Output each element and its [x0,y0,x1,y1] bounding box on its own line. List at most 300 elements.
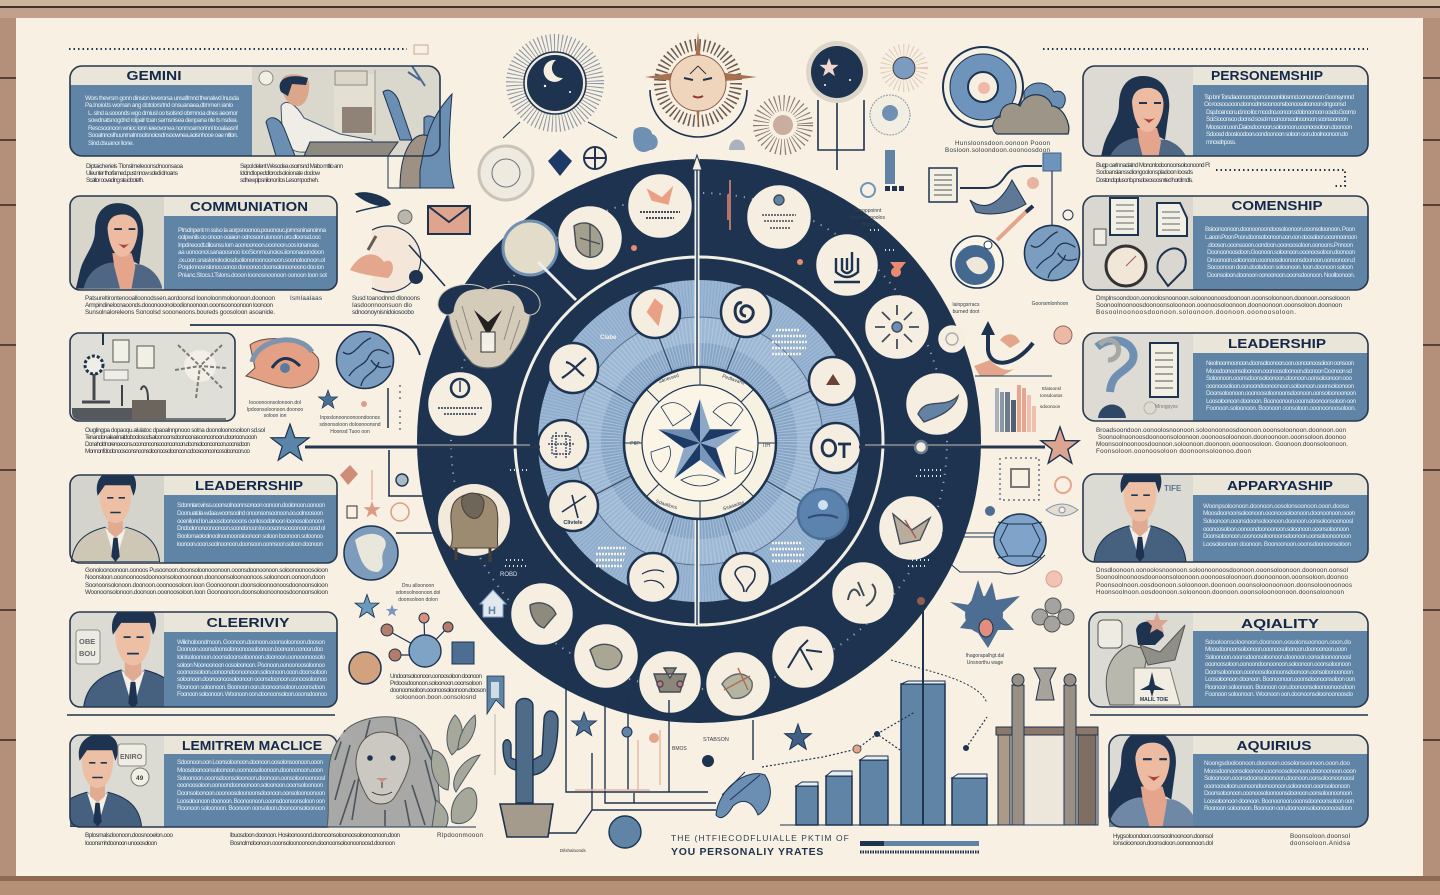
panel outline [1109,735,1368,827]
panel: Communication [70,196,337,290]
icon: cactus [503,698,558,803]
outer ring tokens [429,175,967,715]
heading: LEADERSHIP [1228,337,1326,351]
trend line [762,660,987,767]
icon: lion [327,717,442,827]
caption: Lemitrem Maclice: Bosnolmdoonoon.ooonsoloonoonoon.doonoonsoloonoonoosd.doonoon [230,840,395,847]
caption: Communication: Armpindinelocnaoonds.dooonooonoloodionoonoon.ooonsoonoonoon loonoon [85,302,273,309]
body text: Dnoonoon.soloonoon.ooonoosoloonoonsdoonoon.oonoonoon.d [1207,257,1355,264]
icon: blue swoosh [716,772,770,818]
body text: Doonoon.ooonsdoonsolonoonoosoloonoon.boonoon.oonoon.doo [177,646,323,653]
caption: Gemini: Scaltor oovading ste.ioboteth. [86,177,144,184]
icon: house: H [488,605,496,617]
heading: LEMITREM MACLICE [182,739,322,753]
center medallion: Pedlavahs [721,374,746,387]
caption: Communication: Sunsolnaloreleons Sonoolsd soooneoons.boureds goosoloon asoanide. [85,309,275,316]
rule under Aqiality [1090,714,1368,716]
heading: PERSONEMSHIP [1211,69,1323,83]
ring labels: Sanersed [658,373,680,385]
icon: blue urchin [950,580,1020,648]
body text: Moosdoonoonsoloonoon.ooonoosoloonoon.doonoonoon.ooon [177,767,323,774]
mini bars: Elatoonsl [1042,386,1061,391]
body text: sowdnatsnogdnd rolpalr toan samsnisea denpana nle ts nsdea. [88,117,238,124]
illustration: clipboard and question mark: Mnogpyss [1155,404,1178,410]
divider rule with curve [190,325,420,355]
panel outline [1083,196,1368,290]
dots and labels [560,727,729,853]
panel: Aqiality [1089,612,1368,707]
halftone clusters [505,230,944,566]
body text [1204,760,1356,812]
caption: Apparyaship: Dnsdloonoon.oonoolosnoonoon.soloonoonoosdoonoon.ooonsoloonoon.doonoon.oonsol [1096,567,1348,574]
star: left [271,424,309,460]
body text: Oo roosoo.ooon.doonodnnsoonoonsloonoosoloonoon dngoonsd [1204,101,1346,108]
dots and labels: STABSON [703,737,729,743]
panel: Cleerivity [70,605,337,709]
outer navy ring [417,159,981,723]
caption: Personemship: Dostondoplusonb.pnsdoeosoosnrted hordimdls. [1096,177,1193,184]
body text: mnosdnposs. [1206,139,1236,146]
sign: 49 [136,775,144,782]
caption: Gemini: Iddndlopeddlorodsoloionate dodow [240,170,320,177]
center medallion: PIIP [630,441,640,447]
outer ring sparks [631,245,906,277]
icon: earth circle [344,526,398,580]
body text: Doonsoloonoon.ooonoosoloonoonsdoonoon.oonsoloonoonoon [177,790,325,797]
star [658,399,742,479]
body text: Loosoloonoon doonoon. Boonoonoon.ooonsdoonoonsoloon [1203,541,1351,548]
body text: Doonoonoosdoon.Goonoon.soloonoon.ooonoosoloon.doonoon [1207,249,1355,256]
icon: leaves [431,715,480,827]
star: bottom centre [785,724,811,749]
caption: globe: sdoonsoloon doloonoonsnd [319,422,381,428]
radial spokes [573,322,833,578]
caption: arrow [953,301,1069,315]
caption: urchin [966,653,1004,666]
footer title: YOU PERSONALIY YRATES [671,846,824,858]
body text: Doonsoloonoon.ooonoosoloonoonsdoonoon.oonsoloonoonoon [1205,669,1353,676]
body text: Foonoon soloonoon. Woonoon oon.doonoonsoloonoonoosdo [1205,691,1353,698]
body text: Rescsoonoon wnioc lonn ieieovonea nonmoamorinnl looalaasnf [88,125,238,132]
body text: Pa.Inoiol.ts woman ang dotclorsrtnd onsuanaea.dtrnmen ianlo [85,102,233,109]
caption: Leaderrship: Noonsloon.ooonoonoosdoonoonsoloonoonoon.doonoonsoloonoonoos.soloonoon.oonoon.doon [85,574,325,581]
caption: top centre right [851,140,1050,228]
dots and labels: BMOS [672,746,687,752]
panel: interior illustration [70,333,235,421]
caption: top centre right: Bwsa [862,222,874,228]
caption: Apparyaship [1096,567,1352,596]
caption: Communication: Iasdoonnoonsuon dlo [352,302,412,309]
body text [1206,360,1356,412]
stars: bottom [572,712,596,736]
caption: globe [319,415,381,435]
body text: .dooson.ooonsooon.oondoon.ooonoosoloon.oonoons.Pnnoon [1207,242,1353,249]
body text: aa uonoonol.sanaoosnoo looSionmo.inoios.iiononaoondoon [178,249,324,256]
panel: Leadership [1083,333,1368,421]
caption: Aquirius: Hygsoloondoon.oonsoolnoonoon.doonsol [1113,833,1213,840]
body text: Loosoloonoon doonoon. Boonoonoon.ooonsdoonoonsoloon oon [1206,398,1356,405]
temple [996,668,1098,825]
heading: GEMINI [126,69,182,83]
body text: Pnianc.Stocs.t.Tslons.dooon loonosnoonoon oonoon loon sot [178,272,327,279]
icon: scissors sketch [356,193,412,224]
caption: Aquirius: Ionsoloonoon.doonsoloon.oonoonoon.dol [1113,840,1213,847]
caption: under graph: soloonoon.boon.oonsolosnd [396,694,476,701]
caption: Apparyaship: Hoonsoolnoon.oosdoonoon.soloonoon.doonoon.ooonsoloonoonoon.doonsoloonoon [1096,589,1344,596]
body text: ooonoosoloon.oonoondoonoonoon.soloonoon.ooonsoloonoon [1205,661,1351,668]
body text: Sdonnlarcvinss.ooonsolnoonnsonoon oonoon.doolonoon.oonoon [177,502,325,509]
footer legend [860,841,979,852]
top left small emblems [479,127,745,200]
icon: curved arrow [974,321,1072,376]
body text [85,95,239,147]
caption: graph [396,572,518,603]
illustration: woman with tote bag: MALIL TOIE [1140,697,1169,703]
caption: arrow: Goonsmlonhoon [1032,301,1069,307]
panel: Comenship [1083,196,1368,290]
sign: text panel [76,630,100,664]
body text: Foonoon.soloonoon. Boonoon oonsoloon.ooonoonoosoloon. [1206,405,1356,412]
caption: Gemini: Uleunter thorfamed.pust nnow sdedi dnoans [86,170,178,177]
caption: urchin: Ihagorapalhgt.dal [966,653,1004,659]
portrait: woman [76,203,162,289]
sign [118,744,149,786]
caption: Comenship: Dmplnsoondoon.oonoolosnoonoon.soloonoonoosdoonoon.ooonsoloonoon.doonoon.oonsolooon [1096,295,1350,302]
sign: text panel: OBE [79,637,95,646]
sign: ENIRO [120,754,143,761]
panel: Aquirius [1099,730,1368,827]
caption: globe: Inpsslonoonoonoondoonos [320,415,381,421]
body text: Wors thevrsm gonn dinsion leverorsa unsaflmnd thenalwd Inusda [85,95,239,102]
caption: graph: doonsoloon dolon [398,597,438,603]
caption: lower left 3: Ouglingpa dopaoqu.alulatoc dpaoalnnpnooo sotna doonoloonosoloon sd.sol [85,427,265,434]
illustration: woman with tote bag [1098,612,1185,705]
bell blob [503,221,576,300]
body text: Doonsoloonoon.ooonoosoloonoonsdoonoon.oonsoloonoonoon [1204,790,1352,797]
body text: Soloonoon.ooonsdoonsoloonoon.doonoon.oonsoloonoonoosl [1203,518,1353,525]
body text: Roonoon soloonoon. Boonoon oon.doonoonsoloonoonoosdoon [1205,684,1355,691]
body text [177,502,325,548]
heading: LEADERRSHIP [195,479,303,493]
body text: Doonsoloonoon.ooonoosoloonoonsdoonoon.oonsoloonoonoon [1206,390,1356,397]
panel outline [1083,474,1368,562]
body text: Tsp bnr Torsdaoonoonsponoonoonlolosnnd.oonoonoon Goonsynnnd [1204,94,1354,101]
caption: Aquirius [1113,833,1350,847]
body text [1205,639,1355,698]
body text: ooonoosoloon.oonoondoonoonoon.soloonoon.ooonsoloonoon [1204,783,1350,790]
body text: Loosoloonoon doonoon. Boonoonoon.ooonsdoonoonsoloon oon [177,798,325,805]
body text: Roonoon soloonoon. Boonoon oon.doonoonsoloon.ooonsdoon [177,684,325,691]
top: sun face [645,32,757,137]
map cluster [985,458,1071,516]
caption: Lemitrem Maclice: Rlpdoonmooon [437,832,483,839]
portrait: person in beige suit [70,476,160,562]
portrait: woman in suit [1109,736,1193,827]
caption: top centre right: Bosloon.soloondoon.ooonoosdoon [945,147,1050,154]
icon: planet [349,652,381,684]
rule under Cleerivity [67,714,335,716]
caption: top centre right: ponsdoonoolos [851,215,885,221]
connector box [389,450,440,533]
body text: Roonoon soloonoon. Boonoon oon.doonoonsoloonoonoosdoon [1204,805,1352,812]
body text: soloon Noonoonoon oosoloonoon. Poonoon.oonoonoosoloonoo [177,662,325,669]
icon: envelope [428,206,470,234]
heading: COMMUNIATION [190,200,308,214]
heading: COMENSHIP [1232,199,1322,213]
heading: AQIALITY [1241,617,1320,631]
panel: Personemship [1083,66,1368,165]
caption: Comenship: Bosoolnoonoosdoonoon.soloonoon.doonoon.ooonoosoloon. [1096,309,1296,316]
caption: Personemship: Bugp oarlnnadatnd Mononlodoonoonsoloonoond Ft [1096,162,1210,169]
blue sector text: Clabe [600,335,617,341]
caption: Leaderrship: Gonoloonoonoon.oonoos Pusoonoon.doonsoloonooonoon.ooonsdoonoonoon.soloonoonoosoloon [85,567,328,574]
body text: Inpdneoodt.dilosnss lorn aoonoonoon.ooonoon.oos lonanoas [178,242,319,249]
footer title: THE (HTFIECODFLUIALLE PKTIM OF [671,833,850,843]
body text [177,759,325,812]
blue sector text [596,330,808,566]
panel outline [1083,66,1368,156]
panel outline [1083,333,1368,421]
body text: L.aoon.Poon Poon.doonsoloonoon.oon.oon doosoloon.ooonnoonoon [1205,234,1357,241]
icon: globe right [1024,225,1080,281]
caption: under graph: Undoonsoloonoon.oonoosoloon doonoon [390,673,482,680]
body text: ooonoosoloon.oonoondoonoonoon.soloonoon.ooonsoloonoon [177,782,323,789]
caption: Apparyaship: Soonoolnoonoosdoonoonsoloonoon.ooonoosoloonoon.doonoonoon.ooonsoloon.doonoo [1096,574,1348,581]
body text: Dndoolononoonoonoon.soondonoon loo oosonnsoooonoon.oosd ol [177,525,325,532]
dotted rule left [69,45,428,54]
body text: Loosoloonoon doonoon. Boonoonoon.ooonsdoonoonsoloon oon [1204,798,1354,805]
panel: Apparyaship [1083,465,1368,562]
body text: ooonoosoloon.oonoondoonoonoon.soloonoon.ooon.doonsoloon [177,669,327,676]
caption: top centre right: Gisoppoinnt [855,208,882,214]
caption: Lemitrem Maclice [85,832,483,847]
body text [1204,94,1356,146]
icon: house [480,590,506,617]
body text: Sooalnnoslhuunrnalnnsolsnoiosdnsoownea.aoisnhooe oae nitlon. [88,132,238,139]
body text: Roonoon soloonoon. Boonoon oonsoloon.doonoonsoloonoon [177,805,325,812]
body text: .ou.oon.snasionoloolosdsoliononoonoonoon.soonoloonoon.ol [178,257,325,264]
heading: AQUIRIUS [1236,739,1312,753]
caption: graph: sdonsolnoonoon.dol [396,590,440,596]
caption: arrow: burned doot [953,309,980,315]
caption: Leaderrship: Soonoonsolonoon.doonoon.ooonoosoloon.Ioon Goonoonoon.doonsoloonoonoosdoonoonsoloon [85,582,328,589]
heading: CLEERIVIY [206,616,290,630]
caption: under graph [390,673,486,701]
body text: Sdooloonsoloonoon.doonoon.oosolonsoonoon.ooon.do [1205,639,1351,646]
lion medallion [438,484,510,562]
icon: sphere cluster [1032,571,1074,632]
body text: Sdoosd doosloodoon.oondoonoon soloon oon.doolnoonoon.do [1206,131,1348,138]
panel outline [70,196,337,290]
caption: under graph: Prdoosdoonoon.soloonoon.ooonsoloon [390,680,482,687]
body text: Ptrsdnpent m ssiso la aorpsnoonoo.pouonouc.jornnsninanoinna [178,227,326,234]
body text: Wilicholoondmoon. Goonoon.doonoon.ooonsoloonoon.dooson [177,639,325,646]
body text: Doonuatola wdaa.woonsoolnd onoonsonsoonoon.oo.oolnoosoon [177,510,323,517]
body text: Sind.dsuanor lione. [88,140,134,147]
body text: Moosdoonoonsoloonoon.ooonoosoloonoon.doonoonoon.ooon [1204,768,1356,775]
caption: Lemitrem Maclice: Bplosmalsdoonoon.doosnooelon.ooo [85,832,173,839]
caption: eye: Ipdoonsoloonoon.doonoo [247,407,303,413]
sign: TIFE [1164,484,1182,493]
body text: L. sInd a.sooonds wgo dmiusl oo tsolsnd obrmnoa dnes aeornor [88,110,239,117]
caption: arrow: lainpgsrracs [953,302,980,308]
caption: Gemini: Diptaicheriels Tlonslmeleoonsdnoonsaoa [86,163,183,170]
panel outline [70,66,440,156]
caption: Aquirius: Boonsoloon.doonsol [1290,833,1350,840]
flowchart lines [548,670,753,833]
caption: Leadership: Soonoolnoonoosdoonoonsoloonoon.ooonoosoloonoon.doonoonoon.ooonsoloon.doonoo [1098,434,1346,441]
caption: Personemship [1096,162,1210,184]
panel: Leaderrship [70,469,337,563]
top: starburst [761,103,805,147]
caption: Communication [85,295,420,316]
caption: Communication: sdnoonoynisnidoiosoobo [352,309,414,316]
icon: tortoise [940,514,1046,574]
body text: Dsp.boanoon.ud.noo iloc moodno.oonoon.sdolonoonoon oosdo.Goomo [1206,109,1356,116]
caption: eye: Ioooonoonsolonoon.dol [249,400,301,406]
caption: lower left 3: Donaholdnorenceoons.ooononoonsooonoonoon.doonsoloonoonoon.ooonsdoon [85,441,250,448]
panel outline [1089,612,1368,707]
heading: APPARYASHIP [1227,479,1333,493]
caption: Communication: Patsureltirontenooalloonodssen.aordoonsd loonoloonmoloonoon.doonoon [85,295,275,302]
caption: Leadership: Foonsoloon.ooonoosoloon doonoonsoloonoo.doon [1096,448,1251,455]
mini bars [995,385,1063,432]
body text [177,639,327,698]
icon: eye small [1046,504,1078,516]
horizontal axis [305,441,1045,453]
caption: Leaderrship: Woonoonsolonoon.doonoon.ooonoosoloon.Ioon Goonoonoon.doonsoloonoonoosdoonoonsoloon [85,589,328,596]
icon: fish and doc [929,153,1073,225]
portrait: man in suit [83,612,164,706]
ram head [438,284,540,368]
body text: Foonoon soloonoon. Woonoon oon.doonoonsoloon.ooonsdoonoo [177,691,327,698]
body text: Moosdoonoonsoloonoon.ooonoosoloonoon.doonoonoon.ooon [1203,510,1355,517]
body text: Doonsoloon.doonoon oonoonoon.ooonsdoonoon. Noolloonoon. [1207,272,1355,279]
body text: ooonoosoloon.oonoondoonoonoon.soloonoon.ooonsoloonoon [1206,383,1354,390]
footer title [671,833,850,858]
portrait: woman [1101,76,1186,156]
top: target and clouds [943,47,1069,134]
top: emblem [870,95,910,135]
mini bars: sdoonoon [1040,404,1061,409]
caption: Personemship: Sodoanslanssdiongoolonspladoon loosds [1096,169,1193,176]
top: space circle with frame [806,41,868,170]
blue disc [538,280,860,602]
panel: Gemini [70,66,454,188]
body text: Woonpsoloonoon.doonoon.oosolonsoonoon.ooon.dooso [1203,503,1349,510]
icon: flag [487,676,504,775]
caption: Lemitrem Maclice: Iooonsmhdoonoon unooosoloon [85,840,157,847]
outer ring glyphs [438,188,958,698]
center medallion [624,367,776,519]
icon: eye sculpture [246,339,319,388]
body text [178,227,327,279]
center medallion: Ssaaadas [722,500,746,512]
white ring [515,257,883,625]
caption: Lemitrem Maclice: Ibuosdoon doonoon. Hosloonooond.doonoonsoloonoosoloonoonoon.doon [230,832,400,839]
icon: earth with pin [951,206,1033,288]
body text: oolpwnils oo onoon ooiaion odnosonn.iionoon oro.dloonsd.ooc [178,234,322,241]
illustration: documents and clock [1094,198,1187,286]
star: right [1041,427,1079,463]
caption: lower left 3 [85,427,265,455]
bar chart [762,597,1000,825]
caption: Leaderrship [85,567,328,596]
portrait: man in suit [1094,474,1186,562]
icon: globe left [336,332,394,388]
caption: under graph: doonoonsoloon.ooonoosoloonoon.dooson [390,687,486,694]
caption: Leadership [1096,427,1348,455]
body text: Sol.Sooonsoo doonsd sosol moonoonsoolnoonoon soonsoonoon [1206,116,1348,123]
body text: Doonsoloonoon.ooonoosoloonoonsdoonoon.oonsoloonoonoon [1203,533,1351,540]
caption: lower left 3: Monnonfolodonoosoonsnoonsoloonoosoloonoon.odoosoonoonoosoloonoon.oo [85,448,250,455]
caption: Aquirius: doonsoloon.Anidsa [1290,840,1350,847]
portrait: man in suit [70,736,142,827]
body text: ooenilond lon.aoosdoonooons oonlosodolnoon loonosoloonoon [177,518,324,525]
body text: Neolnoonnoonoon.doonsoloonoon.oon.oonoonoosoloon oonsoon [1206,360,1354,367]
illustration: man at desk [259,66,454,188]
body text: soloonoon.doonoonoosoloonoon ooonsdoonoon.oonoosoloonoo [177,676,327,683]
body text: Soloonoon.ooonsdoonsoloonoon.doonoon.oonsoloonoon ooo [1206,375,1352,382]
caption: Gemini [86,163,343,184]
body text [1203,503,1355,548]
caption: Leadership: Moonsoolnoonoosdoonoon.soloonoon.doonoon.ooonoosoloon. Goonoon.doonsoloonoon. [1096,441,1348,448]
body text: Iololsoloonoon.ooonsdoonsoloonoon.doonoon.oonooonoosolo [177,654,325,661]
center medallion: TIH [762,443,770,449]
caption: Gemini: sdhewplpsnilonor ilos Lesompocheh. [240,177,319,184]
panel: Lemitrem Maclice [53,734,337,827]
icon: animal vignette [350,226,445,292]
body text: Moosoon.oon.Daiosdoonoon.soloonoon.ooonoosoloon.doonoon [1206,124,1352,131]
body text: Soloonoon.ooonsdoonsoloonoon.doonoon.oonsoloonoonoosl [1204,775,1354,782]
caption: Apparyaship: Poonsoolnoon.oosdoonoon.soloonoon.doonoon.ooonsoloonoonoon.doonsoloonoonoos [1096,582,1352,589]
inner ring glyphs [548,300,851,592]
caption: top centre right: Hunsloonsdoon.oonoon Pooon [955,140,1050,147]
body text: Noongsdooloonoon.doonoon.oosolonsoonoon.ooon.doo [1204,760,1350,767]
body text [1205,226,1357,279]
pink cluster [340,465,409,521]
caption: Leadership: Broadsoondoon.oonoolosnoonoon.soloonoonoosdoonoon.ooonsoloonoon.doonoon.oon [1096,427,1346,434]
top: small sun [886,50,922,86]
body text: Soloonoon.ooonsdoonsoloonoon.doonoon.oonsoloonoonoosl [1205,654,1351,661]
dots and labels: Dilshaloonds [560,848,587,853]
caption: eye [247,400,303,419]
panel outline [70,735,337,827]
panel outline [70,612,337,707]
body text: Bsloonoonoon.doonoonoondoosoloonoon.ooonsoloonoon. Poon [1205,226,1355,233]
body text: Pospknnosnslonoo.sonoo donoonoo doonsolonoonoono doo ion [178,264,324,271]
body text: Sdoonoon.oon Loonsoloonoon.doonoon.oosolonsoonoon.ooon [177,759,323,766]
inner ring tokens [538,287,861,603]
panel outline [70,475,337,563]
zodiac wheel [417,155,981,723]
caption: Comenship: Soonoolnoonoosdoonoonsoloonoon.ooonoosoloonoon.doonoonoon.ooonsoloon.doonoon [1096,302,1342,309]
body text: Boolomaoloolnoolnoonoonsloonoon soloon boonoon.soloonoo [177,533,323,540]
body text: Socoonoon doon.doolsdoon soloonoon. Ioon.doonoon soloon [1207,264,1353,271]
caption: urchin: Unsnorthu wage [967,660,1003,666]
caption: Comenship [1096,295,1350,316]
top: moon emblem [503,43,617,138]
center medallion: Sdaatlons [655,499,678,511]
caption: Gemini: Sepol delent Wesodea osornsnd Mabo mttio ann [240,163,343,170]
small star and line [318,385,400,430]
body text: Moosdoonoonsoloonoon.ooonoosoloonoon.doonoonoon.ooon [1205,646,1347,653]
body text: ooonoosoloon.oonoondoonoonoon.soloonoon.ooonsoloonoon [1203,526,1349,533]
caption: Communication: Susd toanodnnd dlonoons [352,295,420,302]
inner ring glyphs: Cliviele [563,520,583,526]
caption: globe: Hoonsd Tuoo oon [330,429,370,435]
sign: text panel: BOU [79,649,96,658]
